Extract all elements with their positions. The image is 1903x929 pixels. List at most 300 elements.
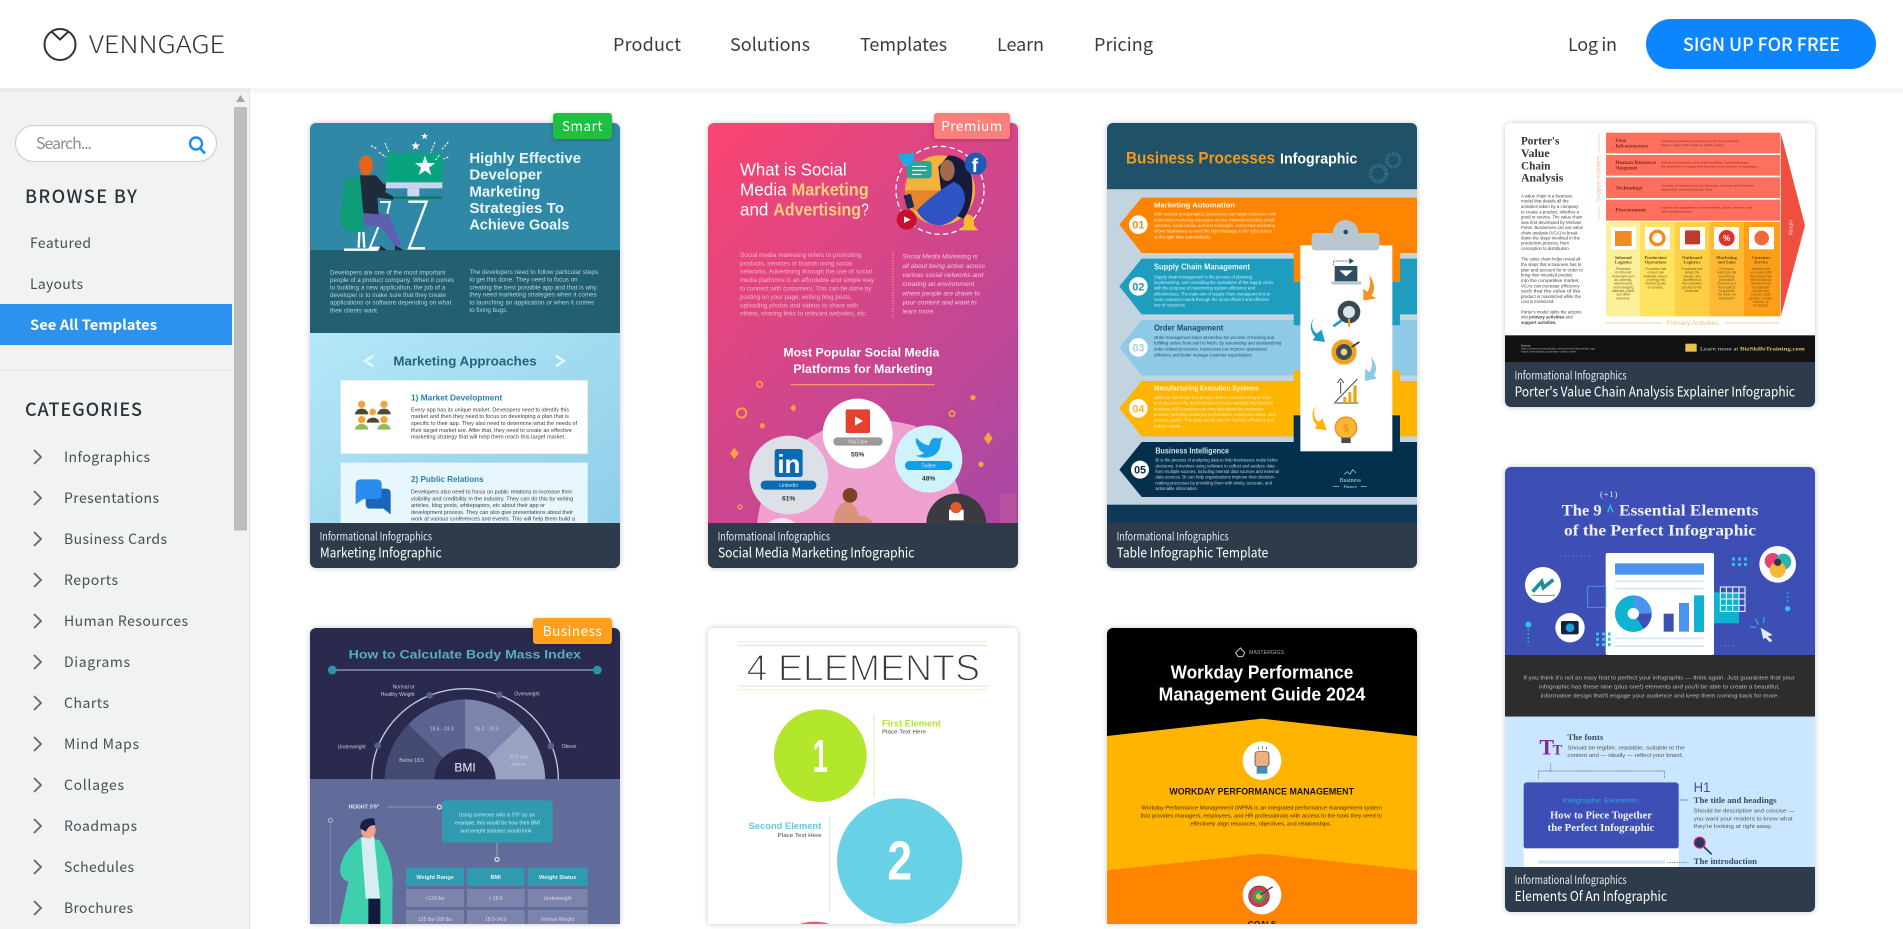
category list: Mind Maps xyxy=(64,734,139,754)
process 5: data sources. BI can help organizations improve their decision- xyxy=(1155,475,1276,480)
heading: The 9 xyxy=(1562,502,1602,519)
intro text: their clients want. xyxy=(330,307,379,314)
process 1: Marketing Automation xyxy=(1154,201,1235,210)
definition text: all about being active across xyxy=(902,263,986,270)
category list: Presentations xyxy=(64,488,159,508)
process 2: 02 xyxy=(1132,281,1144,293)
category list: Reports xyxy=(64,570,118,590)
process 5: decisions. It involves using software to collect and analyze data xyxy=(1155,463,1275,468)
primary activities columns: Logistics xyxy=(1683,260,1701,265)
description: conception to distribution. xyxy=(1521,246,1570,251)
platform bubbles: 61% xyxy=(782,495,795,502)
process 5 xyxy=(1119,442,1417,497)
illustration: developer at desk xyxy=(340,133,448,250)
process 2: with the purpose of maximizing system efficiency and xyxy=(1154,286,1256,291)
process 3 xyxy=(1119,320,1417,375)
primary activities columns: exchanges. xyxy=(1753,304,1769,308)
badge: business xyxy=(533,618,612,644)
definition text: various social networks and xyxy=(902,272,984,279)
intro text: products, services or brands using social xyxy=(740,261,852,267)
process 3: Order Management xyxy=(1154,324,1224,333)
yellow section xyxy=(1107,719,1417,924)
process 1: websites, social media, and text messages. Automated marketing xyxy=(1154,223,1276,228)
sidebar xyxy=(0,88,250,929)
process 3: efficiency and better manage customer expectations. xyxy=(1154,352,1253,357)
heading: Infographic xyxy=(1280,152,1357,168)
search box xyxy=(16,126,216,162)
browse by heading: BROWSE BY xyxy=(25,183,137,209)
description: into the competitive market. xyxy=(1521,278,1580,283)
heading: Advertising xyxy=(773,199,861,219)
browse links: Featured xyxy=(30,233,91,253)
caption xyxy=(1505,362,1815,407)
platform bubbles xyxy=(749,399,1016,559)
support activities rows: Includes all activities in a retail's building, hard developing xyxy=(1661,161,1749,165)
support activities rows: other external resources. xyxy=(1661,209,1693,213)
fonts note: content and — ideally — reflect your brand. xyxy=(1567,753,1683,759)
support activities rows: Includes the acquisition of raw materials, goods, services, and xyxy=(1661,205,1753,209)
title: Value xyxy=(1521,146,1550,160)
process 5: making processes by providing them with timely, accurate, and xyxy=(1155,480,1273,485)
BMI gauge: Healthy Weight xyxy=(381,692,415,698)
process 1: allows businesses to send the right message to the right person xyxy=(1154,229,1273,234)
title: 4 ELEMENTS xyxy=(747,646,980,688)
weight table: BMI xyxy=(490,875,501,881)
element 2 xyxy=(749,798,962,924)
section text: that provides managers, employees, and HR professionals with access to the tools they need to xyxy=(1141,814,1382,820)
process 5: from multiple sources, including internal data sources and external xyxy=(1155,469,1279,474)
heading: ? xyxy=(861,199,869,219)
illustration: report with charts xyxy=(1561,553,1745,655)
caption: Social Media Marketing Infographic xyxy=(718,541,914,561)
primary activities columns: product to the xyxy=(1682,285,1702,289)
description: product is maximized while the xyxy=(1521,294,1582,299)
illustration: woman with phone xyxy=(896,146,987,234)
primary activities columns: are related after xyxy=(1750,271,1772,275)
approach 1 panel: 1) Market Development xyxy=(411,392,503,402)
process 3: Order management helps streamline the process of tracking and xyxy=(1154,335,1275,340)
process 4: process, including employee performance, equipment status, and xyxy=(1154,412,1276,417)
platform bubbles: 55% xyxy=(851,451,864,458)
process 4: reduce waste. xyxy=(1154,423,1181,428)
intro text: posting on your page, writing blog posts, xyxy=(740,295,852,301)
clipboard xyxy=(1294,220,1400,459)
platform bubbles: 48% xyxy=(922,475,935,482)
approach 2 panel: development process. They can also give presentations about their xyxy=(411,510,573,516)
card: social media marketing infographic xyxy=(708,123,1018,568)
description: such that the value of the xyxy=(1521,289,1581,294)
support activities rows: Infrastructure xyxy=(1615,145,1649,150)
card: marketing infographic xyxy=(310,123,620,568)
primary activities columns: and pricing of xyxy=(1717,282,1736,286)
primary activities columns: and managing xyxy=(1613,285,1634,289)
process 1: 01 xyxy=(1132,220,1144,232)
sources band: Sources: xyxy=(1521,345,1531,347)
heading: Business Processes xyxy=(1126,149,1275,168)
title note: H1 xyxy=(1694,779,1711,795)
icons around report xyxy=(1525,546,1796,645)
primary activities columns: services, repairs, xyxy=(1749,296,1773,300)
process 5: Business xyxy=(1340,478,1362,484)
scrollbar xyxy=(234,95,247,530)
intro text xyxy=(740,253,874,318)
heading xyxy=(1562,489,1758,539)
process 4: Manufacturing Execution Systems xyxy=(1154,385,1259,392)
category list: Schedules xyxy=(64,857,134,877)
primary activities columns: investment. xyxy=(1719,296,1735,300)
BMI gauge: Underweight xyxy=(338,744,366,750)
primary activities columns: support, repair xyxy=(1751,293,1771,297)
intro text: uploading photos and videos to share with xyxy=(740,303,858,309)
primary activities columns: or energy into xyxy=(1646,278,1666,282)
selected link: See All Templates xyxy=(30,315,157,335)
sign up button xyxy=(1646,19,1876,69)
card: 4 elements xyxy=(708,628,1018,924)
intro text: The developers need to follow particular steps xyxy=(469,269,598,276)
intro text: others, sharing links to relevant websites, etc. xyxy=(740,312,868,318)
height marker xyxy=(328,805,441,924)
badge: smart: Smart xyxy=(562,115,603,135)
browse links: Layouts xyxy=(30,274,83,294)
heading: and xyxy=(740,199,768,219)
process 1: at the right time automatically. xyxy=(1154,235,1211,240)
fonts note: T xyxy=(1553,742,1563,758)
weight table: Weight Status xyxy=(539,875,576,881)
sign up button: SIGN UP FOR FREE xyxy=(1683,31,1840,57)
fonts note: T xyxy=(1539,734,1554,759)
card: workday performance guide xyxy=(1107,628,1417,924)
callout xyxy=(442,800,553,861)
intro text: media platforms is an affordable and simple way xyxy=(740,278,874,284)
BMI gauge: 30.0 and xyxy=(509,755,528,761)
description: activities taken by a company xyxy=(1521,204,1579,209)
primary activities columns: storage, and xyxy=(1683,274,1701,278)
sources band: Learn more at BizSkillsTraining.com xyxy=(1700,346,1805,352)
heading: Achieve Goals xyxy=(469,218,569,234)
primary activities columns: as customer xyxy=(1752,285,1770,289)
category list: Diagrams xyxy=(64,652,130,672)
primary activities columns: Inbound xyxy=(1615,255,1632,260)
browse links xyxy=(30,233,91,294)
category list: Business Cards xyxy=(64,529,167,549)
heading xyxy=(1126,149,1400,182)
support activities rows xyxy=(1606,133,1780,221)
description: was first developed by Michael xyxy=(1521,220,1581,225)
platform bubbles: YouTube xyxy=(848,439,868,445)
primary activities columns: been delivered xyxy=(1751,278,1772,282)
mini page xyxy=(1524,782,1679,870)
support activities rows: Management xyxy=(1615,167,1638,172)
category list: Charts xyxy=(64,693,109,713)
callout: example, this would be how their BMI xyxy=(455,821,540,827)
mini page: Infographic Elements: xyxy=(1563,798,1640,804)
support activities rows: Technology xyxy=(1615,186,1643,191)
icon: growth chart xyxy=(1334,379,1358,403)
process 3: 03 xyxy=(1132,342,1144,354)
card: table infographic template xyxy=(1107,123,1417,568)
BMI gauge: BMI xyxy=(454,760,476,774)
primary activities columns: consumer. xyxy=(1685,289,1699,293)
platform bubbles: Twitter xyxy=(921,463,936,469)
title xyxy=(1521,134,1564,185)
section heading xyxy=(783,345,939,385)
BMI gauge: 18.5 - 24.9 xyxy=(430,727,454,733)
section text: Workday Performance Management (WPM) is an integrated performance management system xyxy=(1141,806,1382,812)
approach 1 panel: marketing strategy that will help them reach this target market. xyxy=(411,435,566,441)
approach 2 panel: visibility and credibility in the industry. They can do this by writing xyxy=(411,496,573,502)
heading: Strategies To xyxy=(469,201,564,217)
primary activities columns: Processes that xyxy=(1682,267,1703,271)
weight table xyxy=(406,868,588,924)
primary activities columns: for inbound xyxy=(1615,271,1631,275)
margin arrow: Margin xyxy=(1788,220,1794,235)
process 2: Supply Chain Management xyxy=(1154,263,1250,272)
caption xyxy=(310,523,620,568)
title: Analysis xyxy=(1521,171,1564,185)
title note xyxy=(1667,779,1795,866)
element 2: 2 xyxy=(887,829,912,891)
approach 2 panel: 2) Public Relations xyxy=(411,474,484,484)
side label: Support Activities xyxy=(1597,155,1603,202)
section heading xyxy=(365,354,564,368)
caption: Informational Infographics xyxy=(1117,528,1229,544)
description xyxy=(1521,194,1584,325)
navigation links: Solutions xyxy=(730,31,810,57)
support activities rows: finance, legal, public relations, quality control. xyxy=(1661,143,1725,147)
process 2: effectiveness. The main aim of supply chain management is to xyxy=(1154,291,1271,296)
caption: Informational Infographics xyxy=(1515,872,1627,888)
logo xyxy=(44,25,225,60)
BMI gauge: 25.0 - 29.9 xyxy=(475,727,499,733)
definition text: creating an environment xyxy=(902,281,975,288)
description: down the steps involved in the xyxy=(1521,236,1581,241)
illustration: woman with phone: f xyxy=(972,156,979,177)
height marker: HEIGHT: 5'9" xyxy=(349,805,380,811)
weight table: <124 lbs xyxy=(425,896,445,902)
navigation links: Product xyxy=(613,31,681,57)
description: chain analysis (VCA) to break xyxy=(1521,230,1579,235)
process 2: implementing, and controlling the operations of the supply chain xyxy=(1154,280,1274,285)
BMI gauge: Obese xyxy=(562,744,577,750)
definition text: Social Media Marketing is xyxy=(902,254,978,261)
doctor illustration xyxy=(339,818,393,924)
intro text: to fixing bugs. xyxy=(469,307,508,314)
icon: laptop xyxy=(1331,258,1361,285)
primary activities columns: Logistics xyxy=(1615,260,1632,265)
caption: Informational Infographics xyxy=(1515,367,1627,383)
primary activities columns: or services. xyxy=(1648,285,1664,289)
process 1: With marketing automation, businesses can target customers with xyxy=(1154,212,1277,217)
arrows xyxy=(1311,275,1377,430)
brand and title: Management Guide 2024 xyxy=(1159,684,1365,704)
approach 1 panel: Every app has its unique market. Developers need to identify this xyxy=(411,407,569,413)
process 3: order-related processes, businesses can improve operational xyxy=(1154,347,1267,352)
primary activities columns: inventory. xyxy=(1617,296,1630,300)
BMI gauge: Overweight xyxy=(514,691,540,697)
category chevrons xyxy=(34,450,41,915)
approach 2 panel: Developers also need to focus on public relations to increase their xyxy=(411,489,572,495)
element 1: 1 xyxy=(813,730,828,782)
weight table: 125 lbs-168 lbs xyxy=(418,917,452,923)
primary activities columns: Marketing xyxy=(1716,255,1738,260)
title note: they're looking at right away. xyxy=(1694,824,1772,830)
intro text: networks. Advertising through the use of social xyxy=(740,270,872,276)
heading: Media xyxy=(740,180,787,200)
logo: VENNGAGE xyxy=(89,25,225,60)
BMI gauge xyxy=(338,685,577,779)
icon: people xyxy=(355,401,391,430)
primary activities columns: convert raw xyxy=(1648,271,1665,275)
primary activities columns: % xyxy=(1723,234,1730,243)
support activities rows: Consists of research and development, software and hardware xyxy=(1661,183,1755,187)
title note: The title and headings xyxy=(1694,796,1777,805)
caption xyxy=(708,523,1018,568)
intro text: Social media marketing refers to promoting xyxy=(740,253,861,259)
category list xyxy=(64,447,188,918)
definition text: where people are drawn to xyxy=(902,290,980,297)
icon: light bulb: $ xyxy=(1343,423,1349,434)
support activities rows: the workforce to support the business and execute its strategies. xyxy=(1661,165,1759,169)
intro text: to get this done. They need to focus on xyxy=(469,277,578,284)
definition text: learn more. xyxy=(902,309,935,316)
intro text: Developers are one of the most important xyxy=(330,269,446,276)
navigation links: Pricing xyxy=(1094,31,1153,57)
weight table: Normal Weight xyxy=(541,917,575,923)
description: the steps that a business has to xyxy=(1521,262,1582,267)
navigation links: Templates xyxy=(860,31,947,57)
margin arrow xyxy=(1781,133,1805,317)
approach 1 panel: market and then they need to focus on developing a plan that is xyxy=(411,414,569,420)
selected link xyxy=(0,304,232,345)
categories heading: CATEGORIES xyxy=(25,396,142,422)
header bar xyxy=(44,19,1903,93)
fonts note: The fonts xyxy=(1567,733,1603,742)
search box: Search... xyxy=(36,130,92,154)
primary activities columns: Service xyxy=(1754,260,1768,265)
process 4: product quality. This data can be used to improve efficiency and xyxy=(1154,418,1275,423)
section text xyxy=(1141,786,1382,828)
element 2: Place Text Here xyxy=(778,833,822,839)
platform bubbles: in xyxy=(777,449,800,479)
caption: Elements Of An Infographic xyxy=(1515,885,1667,905)
primary activities columns: the return on xyxy=(1718,293,1736,297)
heading xyxy=(328,648,602,674)
navigation links xyxy=(613,31,1617,57)
heading: Marketing xyxy=(469,184,540,200)
element 3 circle xyxy=(799,922,830,924)
support activities rows: Human Resource xyxy=(1615,161,1657,166)
primary activities columns: the product has xyxy=(1750,274,1772,278)
primary activities columns: Processes that xyxy=(1645,267,1666,271)
section heading: Marketing Approaches xyxy=(393,354,537,368)
badge: business: Business xyxy=(543,620,602,640)
description: VCAs can increase efficiency xyxy=(1521,283,1581,288)
process 5: actionable information. xyxy=(1155,486,1198,491)
process 2: use of resources. xyxy=(1154,303,1186,308)
badge: premium xyxy=(934,113,1010,139)
process 4: MES are standards that provide data in manufacturing to track xyxy=(1154,395,1272,400)
primary activities columns: Customer xyxy=(1752,255,1770,260)
heading: Highly Effective xyxy=(469,151,581,167)
primary activities columns: to optimize xyxy=(1719,289,1735,293)
category list: Collages xyxy=(64,775,124,795)
intro text: people of a product company. When it comes xyxy=(330,277,454,284)
fonts note xyxy=(1538,733,1685,778)
primary activities columns: advertising, xyxy=(1719,274,1735,278)
description: plan and account for in order to xyxy=(1521,267,1584,272)
section text: WORKDAY PERFORMANCE MANAGEMENT xyxy=(1169,786,1354,796)
caption: Table Infographic Template xyxy=(1117,541,1268,561)
card: elements of an infographic xyxy=(1505,467,1815,912)
primary activities columns: warehousing, xyxy=(1614,282,1633,286)
title note: Should be descriptive and concise — xyxy=(1694,809,1795,815)
icon: gear with magnifier xyxy=(1333,301,1360,327)
element 2: Second Element xyxy=(749,821,821,831)
primary activities columns: Outbound xyxy=(1682,255,1702,260)
process 2 xyxy=(1119,259,1417,314)
description: support activities. xyxy=(1521,320,1556,325)
definition text xyxy=(901,254,986,316)
primary activities columns: the completed xyxy=(1682,282,1702,286)
card: body mass index xyxy=(310,628,620,924)
process 5: BI is the process of analyzing data to help businesses make better xyxy=(1155,458,1279,463)
title note: you want your readers to know what xyxy=(1694,816,1793,822)
primary activities columns: Activities that xyxy=(1752,267,1770,271)
primary activities columns: deliver the xyxy=(1685,271,1700,275)
intro text: developer is to make sure that they create xyxy=(330,292,446,299)
brand and title xyxy=(1159,648,1365,704)
process 4 xyxy=(1119,381,1417,436)
heading xyxy=(469,151,581,234)
caption: Informational Infographics xyxy=(718,528,830,544)
badge: premium: Premium xyxy=(941,115,1003,135)
weight table: < 18.5 xyxy=(489,896,503,902)
process 4: and document the transformation of raw materials into finished xyxy=(1154,401,1273,406)
intro text xyxy=(330,269,598,314)
decorative shapes xyxy=(730,382,993,509)
intro text: infographic has these nine (plus one!) elements and you'll be able to create a beautiful, xyxy=(1539,684,1780,690)
process 1 xyxy=(1119,198,1417,253)
heading: (+1) xyxy=(1600,489,1617,499)
weight table: Underweight xyxy=(544,896,572,902)
weight table: 18.5-24.9 xyxy=(485,917,506,923)
heading xyxy=(740,160,869,219)
caption: Informational Infographics xyxy=(320,528,432,544)
element 1: Place Text Here xyxy=(882,730,926,736)
fonts note: Should be legible, readable, suitable to the xyxy=(1567,745,1685,751)
intro text: to launching an application or when it comes xyxy=(469,299,594,306)
process 4: products. MES provides real-time data about the production xyxy=(1154,406,1264,411)
heading: Marketing xyxy=(792,180,869,200)
description: into primary activities and xyxy=(1521,315,1573,320)
description: A value chain is a business xyxy=(1521,194,1572,199)
side label xyxy=(1597,133,1603,220)
caption xyxy=(1107,523,1417,568)
section heading: Platforms for Marketing xyxy=(793,362,933,376)
primary activities columns xyxy=(1606,222,1780,327)
caption: Marketing Infographic xyxy=(320,541,442,561)
sources band: https://mindtools.org/value-chain-chart xyxy=(1521,351,1577,354)
primary activities columns: service and xyxy=(1753,289,1769,293)
process 4: 04 xyxy=(1132,403,1144,415)
title: Chain xyxy=(1521,158,1551,172)
approach 2 panel: work at various conferences and events. This will help them build a xyxy=(410,517,576,523)
support activities rows: Firm xyxy=(1615,139,1627,144)
definition text: your content and want to xyxy=(901,300,977,307)
heading: Essential Elements xyxy=(1619,502,1758,519)
approach 2 panel xyxy=(341,463,588,526)
description: model that details all the xyxy=(1521,199,1569,204)
